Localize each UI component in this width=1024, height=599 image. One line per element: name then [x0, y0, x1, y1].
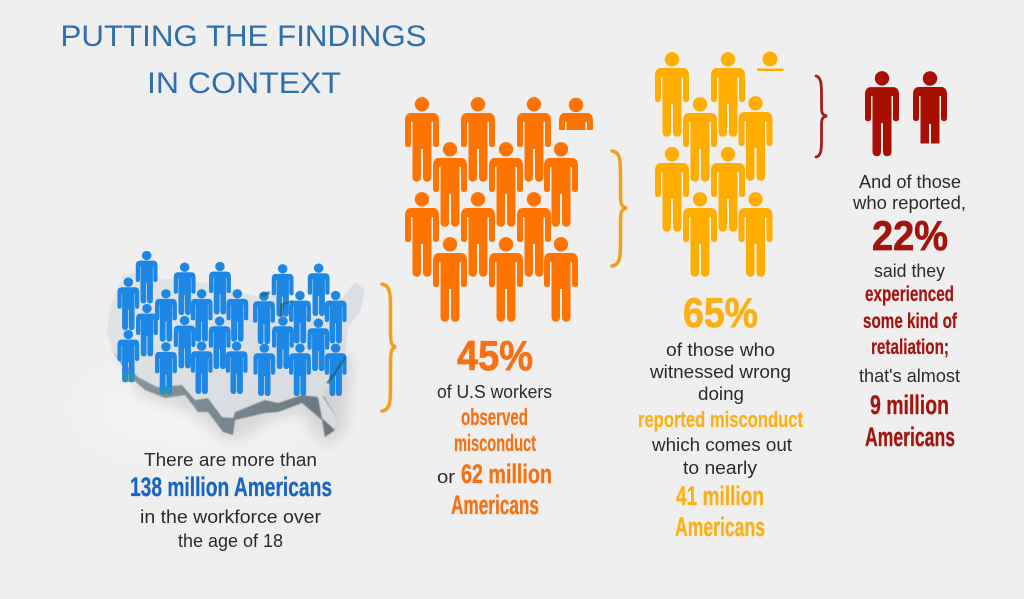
- observed misconduct statistic: 45%: [457, 332, 533, 379]
- reported misconduct statistic: Americans: [675, 512, 765, 542]
- reported misconduct statistic: doing: [698, 384, 744, 404]
- retaliation statistic: retaliation;: [871, 336, 949, 359]
- observed misconduct statistic: Americans: [451, 490, 539, 520]
- retaliation statistic: And of those: [859, 172, 961, 192]
- brace: observers to reporters: [612, 151, 627, 266]
- map side wall: [113, 352, 338, 437]
- map of the United States: [90, 273, 365, 445]
- retaliation statistic: that's almost: [859, 366, 960, 386]
- workforce caption: [130, 450, 332, 551]
- reported misconduct statistic: [638, 289, 804, 542]
- brace: reporters to retaliation: [816, 76, 827, 157]
- title: IN CONTEXT: [147, 67, 341, 100]
- workforce caption: 138 million Americans: [130, 472, 332, 502]
- observed misconduct statistic: misconduct: [454, 430, 536, 456]
- retaliation statistic: some kind of: [863, 310, 958, 333]
- panel: observed misconduct: [405, 97, 593, 520]
- lake and coast tints over figures: [124, 291, 346, 394]
- panel: retaliation: [852, 71, 966, 452]
- reported misconduct statistic: witnessed wrong: [649, 362, 791, 382]
- retaliation statistic: 22%: [872, 212, 948, 259]
- reported misconduct statistic: 65%: [683, 289, 758, 336]
- blue people figures: [118, 251, 346, 396]
- reported misconduct statistic: to nearly: [683, 458, 757, 478]
- red people figures: [865, 71, 947, 156]
- retaliation statistic: experienced: [865, 283, 954, 306]
- observed misconduct statistic: or: [437, 467, 455, 487]
- reported misconduct statistic: reported misconduct: [638, 407, 804, 432]
- map top face: [107, 273, 365, 430]
- workforce caption: the age of 18: [178, 531, 283, 551]
- reported misconduct statistic: which comes out: [651, 435, 792, 455]
- workforce caption: in the workforce over: [140, 507, 321, 527]
- orange people figures: [405, 97, 593, 322]
- retaliation statistic: [852, 172, 966, 452]
- observed misconduct statistic: of U.S workers: [437, 382, 552, 402]
- observed misconduct statistic: 62 million: [461, 459, 552, 489]
- title: [60, 20, 427, 100]
- yellow people figures: [655, 52, 784, 277]
- observed misconduct statistic: [437, 332, 552, 520]
- observed misconduct statistic: observed: [461, 404, 528, 430]
- reported misconduct statistic: of those who: [666, 340, 775, 360]
- panel: reported misconduct: [638, 52, 804, 542]
- retaliation statistic: who reported,: [852, 193, 966, 213]
- panel: workforce map: [90, 251, 365, 551]
- title: PUTTING THE FINDINGS: [60, 20, 427, 53]
- retaliation statistic: said they: [874, 261, 945, 281]
- brace: workforce to observers: [382, 284, 396, 411]
- retaliation statistic: Americans: [865, 422, 955, 452]
- retaliation statistic: 9 million: [870, 390, 949, 420]
- reported misconduct statistic: 41 million: [676, 481, 764, 511]
- workforce caption: There are more than: [144, 450, 317, 470]
